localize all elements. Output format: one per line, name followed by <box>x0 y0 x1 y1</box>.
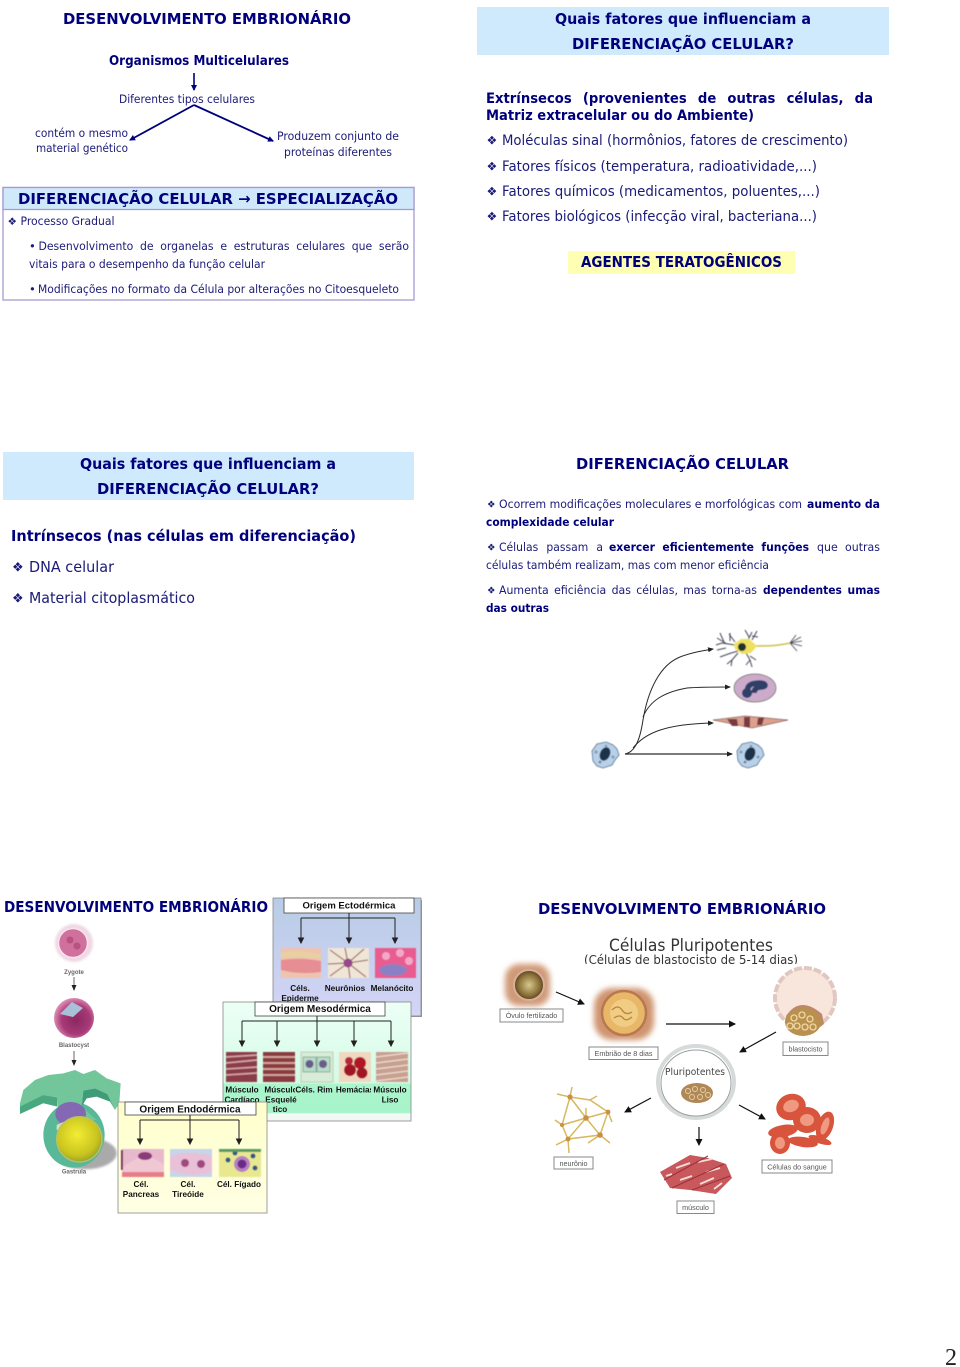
heading: DIFERENCIAÇÃO CELULAR <box>576 454 789 473</box>
diagram: stem cell differentiation <box>592 630 802 768</box>
paragraph: exercer eficientemente funcoes: exercer eficientemente funções <box>609 540 809 554</box>
illustration: muscle fibers <box>660 1155 732 1214</box>
labels: Cél. <box>133 1180 149 1189</box>
labels <box>123 1180 261 1199</box>
labels: Músculo <box>225 1086 259 1094</box>
subheading: blastocisto: (Células de blastocisto de 5-14 dias) <box>584 952 798 967</box>
arrow: down to cell types <box>193 73 195 90</box>
paragraph: aumento da complexidade <box>486 497 880 529</box>
bullet list: Fatores químicos (medicamentos, poluentes,...) <box>502 184 820 200</box>
title: DESENVOLVIMENTO EMBRIONÁRIO <box>538 899 826 918</box>
illustration: 8 day embryo <box>589 988 658 1060</box>
icon: stem cell <box>592 742 619 768</box>
labels: Céls. <box>290 984 310 993</box>
bullet: dna celular: DNA celular <box>29 558 115 576</box>
illustration: 8 day embryo: Embrião de 8 dias <box>595 1049 653 1058</box>
header: Origem Ectodérmica <box>303 900 396 912</box>
icon: blastocyst: Blastocyst <box>59 1043 89 1049</box>
paragraph: aumento da complexidade: ❖ <box>487 500 496 510</box>
bullet list: ❖ <box>486 160 497 174</box>
panel: diferenciacao celular text and diagram <box>486 454 880 768</box>
illustration: petri dish <box>658 1046 734 1118</box>
heading banner: Quais fatores que influenciam a <box>555 10 811 28</box>
illustration: neurons <box>554 1087 612 1169</box>
labels: Músculo <box>264 1086 298 1094</box>
subheading: extrinsecos: Matriz extracelular ou do Ambiente) <box>486 108 754 124</box>
bullet: organelas: • <box>29 239 36 253</box>
paragraph: aumento da complexidade: complexidade celular <box>486 515 614 529</box>
illustration: blastocyst <box>775 968 835 1056</box>
text: same genetic material: material genético <box>36 141 128 155</box>
header <box>255 1002 385 1016</box>
heading banner: DIFERENCIAÇÃO CELULAR? <box>97 479 319 498</box>
tree arrows <box>138 1115 242 1144</box>
paragraph: dependentes umas das outras: ❖ <box>487 586 496 596</box>
illustration: blastocyst: blastocisto <box>789 1044 822 1054</box>
labels: Tireóide <box>172 1190 204 1199</box>
paragraph: exercer eficientemente funcoes: células também realizam, mas com menor eficiência <box>486 558 769 572</box>
icon: zygote <box>55 924 93 976</box>
illustration: petri dish: Pluripotentes <box>665 1067 725 1078</box>
labels: Cardíaco <box>224 1096 260 1104</box>
bullet list: Moléculas sinal (hormônios, fatores de crescimento) <box>502 133 848 149</box>
header: Origem Mesodérmica <box>269 1004 371 1015</box>
bullet list: ❖ <box>486 134 497 148</box>
panel: origem endodermica <box>118 1102 267 1213</box>
bullet list: ❖ <box>486 210 497 224</box>
header <box>284 898 414 913</box>
labels: Céls. Rim <box>295 1086 333 1094</box>
text: same genetic material <box>35 126 128 155</box>
title: DESENVOLVIMENTO EMBRIONÁRIO <box>63 9 351 28</box>
bullet: organelas: vitais para o desempenho da função celular <box>29 257 265 271</box>
icon: blastocyst <box>54 998 94 1049</box>
bullet: organelas <box>29 239 409 271</box>
bullet: modificacoes: • <box>29 282 36 296</box>
icon: differentiated cell <box>737 742 764 768</box>
panel: desenvolvimento embrionario diagram <box>3 9 414 300</box>
panel: origem mesodermica <box>223 1002 411 1121</box>
labels: Pancreas <box>123 1190 160 1199</box>
bullet: material citoplasmatico: ❖ <box>12 592 24 606</box>
labels <box>224 1086 406 1112</box>
bullet: processo gradual: Processo Gradual <box>20 214 114 228</box>
arrow: branch to left <box>130 105 194 140</box>
paragraph: dependentes umas das outras: Aumenta eficiência das células, mas torna-as <box>499 583 757 597</box>
cell images <box>122 1149 261 1177</box>
bullet list <box>486 133 848 225</box>
callout: agentes teratogenicos: AGENTES TERATOGÊNICOS <box>581 252 782 271</box>
icon: gastrula <box>20 1070 121 1175</box>
bullet: material citoplasmatico: Material citoplasmático <box>29 589 195 607</box>
arrow: embryo to blastocyst <box>666 1023 735 1025</box>
panel: fatores intrinsecos <box>3 452 414 607</box>
panel: celulas pluripotentes <box>500 899 838 1214</box>
illustration: fertilized ovum: Óvulo fertilizado <box>506 1011 557 1020</box>
heading banner: Quais fatores que influenciam a <box>80 455 336 473</box>
text: different proteins: proteínas diferentes <box>284 145 392 159</box>
illustration: blood cells: Células do sangue <box>767 1162 827 1172</box>
labels: Músculo <box>373 1086 407 1094</box>
cell images <box>226 1052 408 1082</box>
paragraph: exercer eficientemente funcoes: ❖ <box>487 542 496 554</box>
arrow: ovum to embryo <box>556 992 584 1004</box>
paragraph: dependentes umas das outras: das outras <box>486 601 549 615</box>
header: Origem Endodérmica <box>139 1104 241 1116</box>
subheading: intrinsecos: Intrínsecos (nas células em diferenciação) <box>11 527 356 545</box>
panel: diferenciacao celular especializacao <box>3 188 414 300</box>
icon: muscle spindle <box>713 716 788 728</box>
illustration: neurons: neurônio <box>560 1159 587 1168</box>
heading banner <box>3 452 414 500</box>
subheading: extrinsecos <box>486 91 873 124</box>
paragraph: exercer eficientemente funcoes: Células passam a <box>499 540 603 554</box>
text: diferentes tipos celulares: Diferentes tipos celulares <box>119 92 255 106</box>
subheading: extrinsecos: Extrínsecos (provenientes de outras células, da <box>486 91 873 107</box>
paragraph: exercer eficientemente funcoes: que outras <box>817 540 880 554</box>
tree arrows <box>298 913 398 943</box>
arrows: lineage curves <box>625 649 732 754</box>
heading: organismos multicelulares: Organismos Multicelulares <box>109 54 289 69</box>
labels: Liso <box>382 1096 398 1104</box>
bullet list: Fatores biológicos (infecção viral, bacteriana...) <box>502 209 817 225</box>
icon: neuron <box>716 630 802 667</box>
bullet: processo gradual: ❖ <box>8 216 17 228</box>
heading banner: DIFERENCIAÇÃO CELULAR? <box>572 34 794 53</box>
panel: desenvolvimento embrionario germ layers <box>4 897 422 1213</box>
heading banner <box>477 7 889 55</box>
bullet list: Fatores físicos (temperatura, radioatividade,...) <box>502 159 817 175</box>
arrow: dish to blood cells <box>739 1105 765 1119</box>
arrow: branch to right <box>194 105 273 141</box>
text: different proteins: Produzem conjunto de <box>277 129 399 143</box>
arrow: dish to neuron <box>625 1098 651 1112</box>
labels: tico <box>273 1105 287 1114</box>
labels: Cél. Fígado <box>217 1180 261 1189</box>
illustration: embryo stages <box>20 924 121 1175</box>
illustration: blood cells <box>762 1090 838 1173</box>
panel: origem ectodermica <box>273 898 422 1017</box>
arrow: blastocyst to dish <box>740 1032 776 1052</box>
title: DESENVOLVIMENTO EMBRIONÁRIO <box>4 897 268 916</box>
icon: zygote: Zygote <box>64 970 84 976</box>
panel heading: DIFERENCIAÇÃO CELULAR → ESPECIALIZAÇÃO <box>18 189 398 208</box>
text: different proteins <box>277 129 399 159</box>
labels: Hemácias <box>336 1086 375 1094</box>
paragraph: aumento da complexidade: Ocorrem modificações moleculares e morfológicas com <box>499 497 802 511</box>
labels: Epiderme <box>281 994 319 1003</box>
icon: lilac cell <box>734 674 776 702</box>
paragraph: dependentes umas das outras: dependentes umas <box>763 583 880 597</box>
icon: gastrula: Gastrula <box>62 1169 87 1175</box>
arrow: blastocyst to gastrula <box>73 1051 75 1065</box>
panel: fatores extrinsecos <box>477 7 889 274</box>
labels: Cél. <box>180 1180 196 1189</box>
bullet: dna celular: ❖ <box>12 560 24 576</box>
bullet: modificacoes: Modificações no formato da Célula por alterações no Citoesqueleto <box>38 282 399 296</box>
illustration: fertilized ovum <box>500 964 563 1022</box>
bullet list: ❖ <box>486 184 497 198</box>
labels: Esquelé <box>265 1096 297 1104</box>
labels: Melanócito <box>371 984 413 993</box>
illustration: muscle fibers: músculo <box>682 1203 709 1212</box>
paragraph: exercer eficientemente funcoes <box>486 540 880 572</box>
labels <box>281 984 413 1003</box>
paragraph: aumento da complexidade: aumento da <box>807 497 880 511</box>
bullet: organelas: Desenvolvimento de organelas e estruturas celulares que serão <box>38 239 409 253</box>
text: same genetic material: contém o mesmo <box>35 126 128 140</box>
cell images <box>281 948 416 978</box>
arrow: zygote to blastocyst <box>73 977 75 990</box>
arrow: dish to muscle <box>698 1127 700 1145</box>
header <box>125 1102 256 1116</box>
paragraph: dependentes umas das outras <box>486 583 880 615</box>
tree arrows <box>240 1016 394 1046</box>
heading: celulas pluripotentes: Células Pluripotentes <box>609 936 773 956</box>
labels: Neurônios <box>325 984 366 993</box>
